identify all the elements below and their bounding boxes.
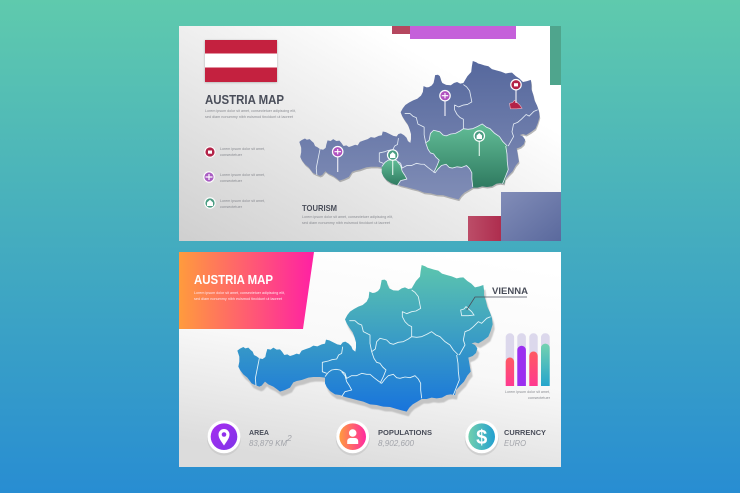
map pin: Vienna red (510, 79, 522, 103)
panel: top tourism map (179, 26, 561, 241)
stat: area: 2 (286, 433, 292, 443)
text block: tourism (302, 214, 393, 225)
stat: area (207, 420, 292, 456)
map pin: East Tyrol green (387, 149, 399, 175)
stat: area: 83,879 KM (249, 438, 288, 448)
map pin: west purple (332, 146, 344, 172)
legend item: purple (203, 171, 265, 183)
legend item: green: consectetuer (220, 204, 243, 209)
text block: intro: Lorem ipsum dolor sit amet, consectetuer adipiscing elit, (205, 108, 296, 113)
map pin: Styria green (474, 130, 485, 156)
text block: intro: sed diam nonummy nibh euismod tincidunt ut laoreet (205, 114, 294, 119)
heading: Austria Map: AUSTRIA MAP (205, 92, 284, 107)
icon: Austrian flag (205, 40, 277, 82)
panel: bottom statistics map (179, 252, 561, 467)
stat: currency (465, 420, 546, 456)
text block: banner (194, 290, 285, 301)
decorative block: red top (392, 26, 410, 34)
legend item: red: Lorem ipsum dolor sit amet, (220, 146, 265, 151)
heading: Austria Map: AUSTRIA MAP (194, 272, 273, 287)
legend item: purple: Lorem ipsum dolor sit amet, (220, 172, 265, 177)
legend item: red: consectetuer (220, 152, 243, 157)
legend item: green: Lorem ipsum dolor sit amet, (220, 198, 265, 203)
stat: populations: POPULATIONS (378, 428, 432, 437)
heading: Tourism: TOURISM (302, 203, 337, 213)
banner (179, 252, 314, 329)
bar chart: Lorem ipsum dolor sit amet, (505, 389, 550, 394)
text block: tourism: Lorem ipsum dolor sit amet, consectetuer adipiscing elit, (302, 214, 393, 219)
stat: populations (336, 420, 432, 456)
legend item: purple: consectetuer (220, 178, 243, 183)
legend item: red (204, 146, 265, 158)
text block: banner: sed diam nonummy nibh euismod tincidunt ut laoreet (194, 296, 283, 301)
callout: Vienna (467, 286, 529, 310)
text block: intro (205, 108, 296, 119)
map: Austria regions (top) (299, 61, 540, 201)
map pin: north purple (439, 90, 451, 116)
legend item: green (204, 197, 265, 209)
text block: tourism: sed diam nonummy nibh euismod tincidunt ut laoreet (302, 220, 391, 225)
stat: currency: CURRENCY (504, 428, 546, 437)
decorative block: red square (468, 216, 501, 241)
text block: banner: Lorem ipsum dolor sit amet, consectetuer adipiscing elit, (194, 290, 285, 295)
bar chart: consectetuer (528, 395, 551, 400)
stat: populations: 8,902,600 (378, 438, 414, 448)
stat: currency: $ (476, 427, 487, 449)
stat: area: AREA (249, 428, 270, 437)
bar chart (505, 333, 551, 400)
decorative block: blue square (501, 192, 561, 241)
decorative block: purple top (410, 26, 516, 39)
decorative block: green right (550, 26, 561, 85)
map: Austria gradient (bottom) (237, 265, 495, 416)
callout: Vienna: VIENNA (492, 286, 529, 296)
stat: currency: EURO (504, 438, 526, 448)
